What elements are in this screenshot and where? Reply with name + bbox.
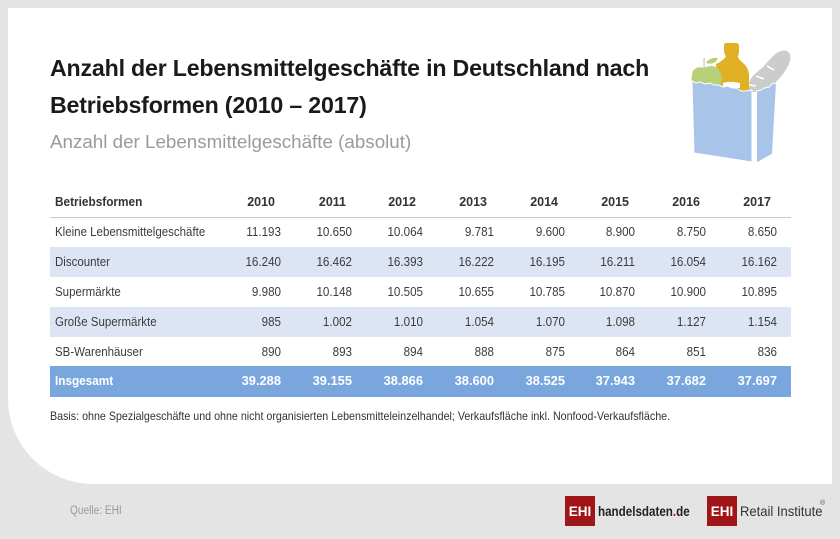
row: Supermärkte: Supermärkte — [55, 285, 121, 299]
icon: bottle — [716, 43, 749, 91]
row: Insgesamt: 37.943 — [596, 374, 635, 388]
row: SB-Warenhäuser: 836 — [758, 345, 777, 359]
row: Discounter: 16.393 — [387, 255, 423, 269]
row: Kleine Lebensmittelgeschäfte — [55, 225, 777, 239]
source: Quelle: EHI — [70, 505, 122, 517]
row: Insgesamt — [50, 366, 791, 397]
row: Große Supermärkte: 1.054 — [465, 315, 494, 329]
row: Insgesamt: 37.697 — [738, 374, 777, 388]
logo: EHI Retail Institute — [707, 496, 826, 526]
icon: paper bag — [692, 81, 776, 163]
row: Kleine Lebensmittelgeschäfte: 10.064 — [387, 225, 423, 239]
subtitle: Anzahl der Lebensmittelgeschäfte (absolut) — [50, 131, 411, 152]
row: Große Supermärkte: 1.010 — [394, 315, 423, 329]
logo: EHI handelsdaten.de: EHI — [569, 504, 591, 519]
row: Insgesamt: 38.866 — [384, 374, 423, 388]
row: Supermärkte — [55, 285, 777, 299]
row: Große Supermärkte: 985 — [262, 315, 281, 329]
row: Supermärkte: 10.505 — [387, 285, 423, 299]
icon: apple — [692, 58, 722, 86]
row: Discounter: 16.162 — [741, 255, 777, 269]
icon: bread — [749, 51, 791, 92]
row: Insgesamt: 38.600 — [455, 374, 494, 388]
row: SB-Warenhäuser: 890 — [262, 345, 281, 359]
row: Insgesamt: 37.682 — [667, 374, 706, 388]
row: Kleine Lebensmittelgeschäfte: 8.650 — [748, 225, 777, 239]
title — [50, 55, 649, 118]
row: Discounter: 16.211 — [600, 255, 635, 269]
table header — [55, 195, 771, 209]
logo: EHI handelsdaten.de — [565, 496, 690, 526]
row: Supermärkte: 10.895 — [741, 285, 777, 299]
table header: 2012 — [388, 195, 416, 209]
footnote: Basis: ohne Spezialgeschäfte und ohne nicht organisierten Lebensmitteleinzelhandel; Verkaufsfläche inkl. Nonfood-Verkaufsfläche. — [50, 410, 670, 423]
row: SB-Warenhäuser: 851 — [687, 345, 706, 359]
row: Discounter: Discounter — [55, 255, 110, 269]
row: Discounter: 16.195 — [529, 255, 565, 269]
row: Große Supermärkte: 1.070 — [536, 315, 565, 329]
table header: 2017 — [743, 195, 771, 209]
row: SB-Warenhäuser: SB-Warenhäuser — [55, 345, 143, 359]
row: Insgesamt: 39.288 — [242, 374, 281, 388]
title: Betriebsformen (2010 – 2017) — [50, 92, 367, 118]
row: SB-Warenhäuser: 864 — [616, 345, 635, 359]
row: Kleine Lebensmittelgeschäfte: 9.600 — [536, 225, 565, 239]
logo: EHI Retail Institute: ® — [820, 500, 825, 507]
row: SB-Warenhäuser: 875 — [546, 345, 565, 359]
logo: EHI handelsdaten.de: handelsdaten.de — [598, 503, 690, 519]
row: Discounter: 16.222 — [458, 255, 494, 269]
icon: grocery bag — [692, 43, 790, 162]
row: Insgesamt: 38.525 — [526, 374, 565, 388]
row: Kleine Lebensmittelgeschäfte: 10.650 — [316, 225, 352, 239]
row: Discounter — [50, 247, 791, 277]
table — [50, 195, 791, 397]
row: Kleine Lebensmittelgeschäfte: 8.900 — [606, 225, 635, 239]
row: Große Supermärkte: Große Supermärkte — [55, 315, 157, 329]
row: SB-Warenhäuser: 894 — [404, 345, 423, 359]
row: Kleine Lebensmittelgeschäfte: 9.781 — [465, 225, 494, 239]
title: Anzahl der Lebensmittelgeschäfte in Deutschland nach — [50, 55, 649, 81]
row: Insgesamt: 39.155 — [313, 374, 352, 388]
row: Supermärkte: 10.870 — [599, 285, 635, 299]
row: SB-Warenhäuser — [55, 345, 777, 359]
table header: 2010 — [247, 195, 275, 209]
row: Discounter: 16.054 — [670, 255, 706, 269]
table header: 2013 — [459, 195, 487, 209]
row: Supermärkte: 10.148 — [316, 285, 352, 299]
row: Supermärkte: 10.655 — [458, 285, 494, 299]
row: Große Supermärkte: 1.098 — [606, 315, 635, 329]
row: SB-Warenhäuser: 893 — [333, 345, 352, 359]
row: Discounter: 16.462 — [316, 255, 352, 269]
row: Supermärkte: 9.980 — [252, 285, 281, 299]
row: Supermärkte: 10.900 — [670, 285, 706, 299]
row: Große Supermärkte: 1.002 — [323, 315, 352, 329]
table header: 2015 — [601, 195, 629, 209]
row: Große Supermärkte: 1.127 — [677, 315, 706, 329]
row: Insgesamt: Insgesamt — [55, 374, 113, 388]
table header: Betriebsformen — [55, 195, 142, 209]
table header: 2011 — [319, 195, 346, 209]
row: Kleine Lebensmittelgeschäfte: Kleine Lebensmittelgeschäfte — [55, 225, 205, 239]
table header: 2014 — [530, 195, 558, 209]
logo: EHI Retail Institute: EHI — [711, 504, 733, 519]
row: SB-Warenhäuser: 888 — [475, 345, 494, 359]
row: Kleine Lebensmittelgeschäfte: 11.193 — [246, 225, 281, 239]
logo: EHI Retail Institute: Retail Institute — [740, 503, 823, 519]
row: Discounter: 16.240 — [245, 255, 281, 269]
table header: 2016 — [672, 195, 700, 209]
row: Große Supermärkte — [50, 307, 791, 337]
row: Große Supermärkte: 1.154 — [748, 315, 777, 329]
row: Supermärkte: 10.785 — [529, 285, 565, 299]
row: Kleine Lebensmittelgeschäfte: 8.750 — [677, 225, 706, 239]
